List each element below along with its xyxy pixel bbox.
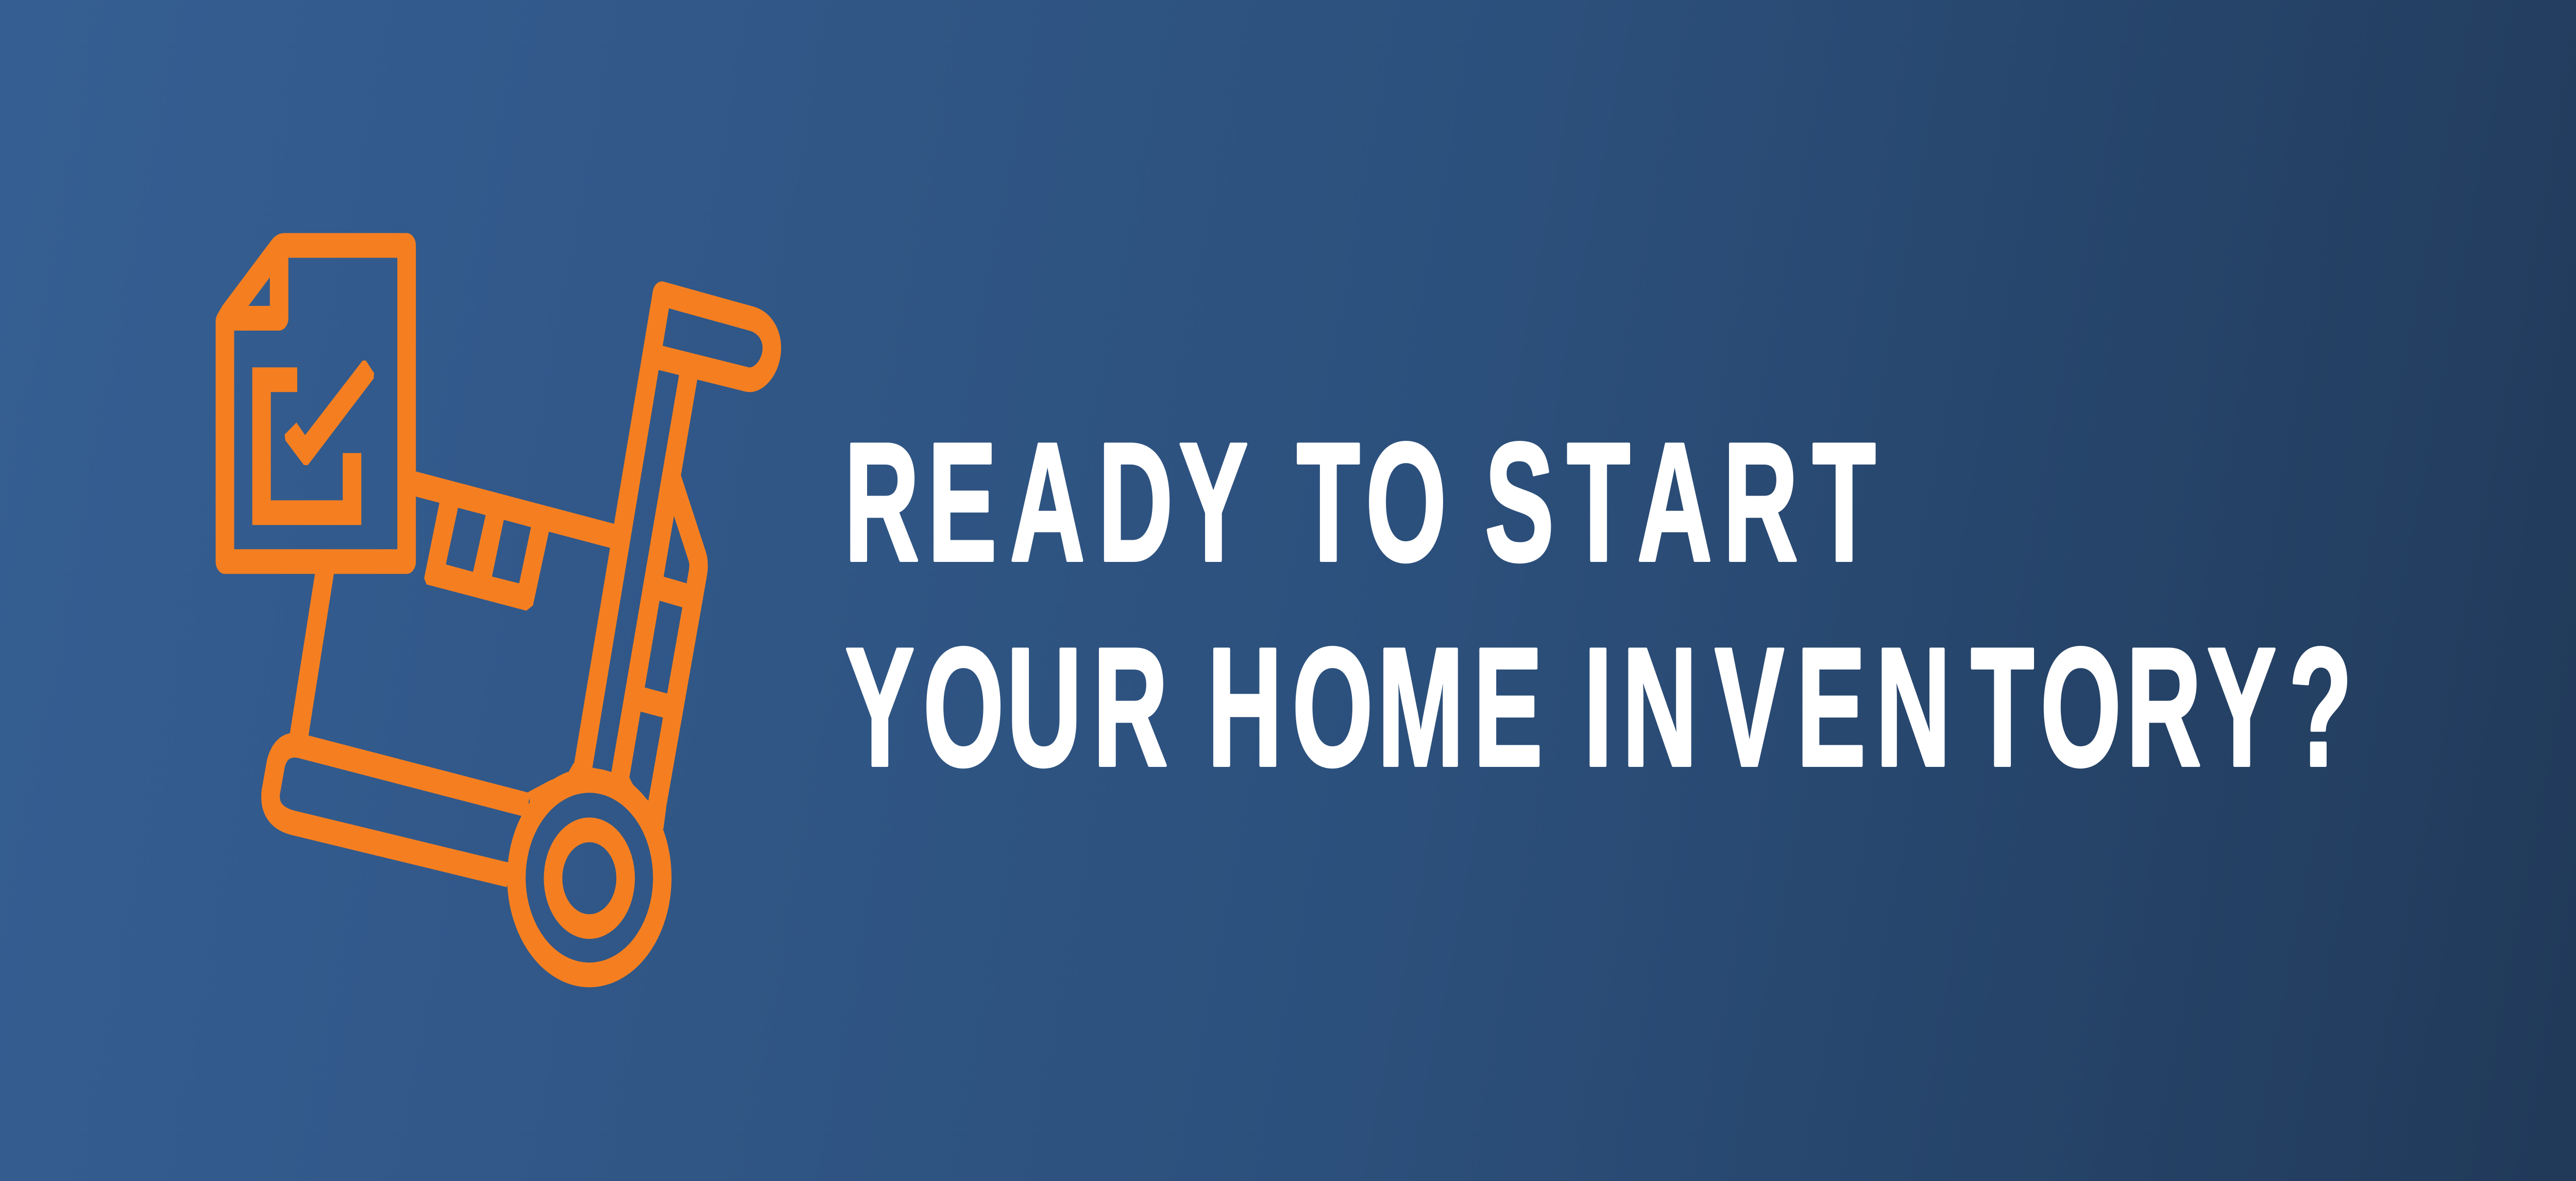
icon: wheel	[516, 780, 662, 975]
headline line 2: YOUR HOME INVENTORY?	[845, 613, 2352, 801]
headline line 1: READY TO START	[844, 408, 1876, 596]
icon: hand truck with box and checklist	[225, 246, 772, 975]
icon: cardboard box	[299, 484, 619, 737]
headline	[844, 408, 2352, 801]
icon: checklist document	[225, 246, 406, 561]
icon: hand truck frame	[270, 294, 772, 875]
